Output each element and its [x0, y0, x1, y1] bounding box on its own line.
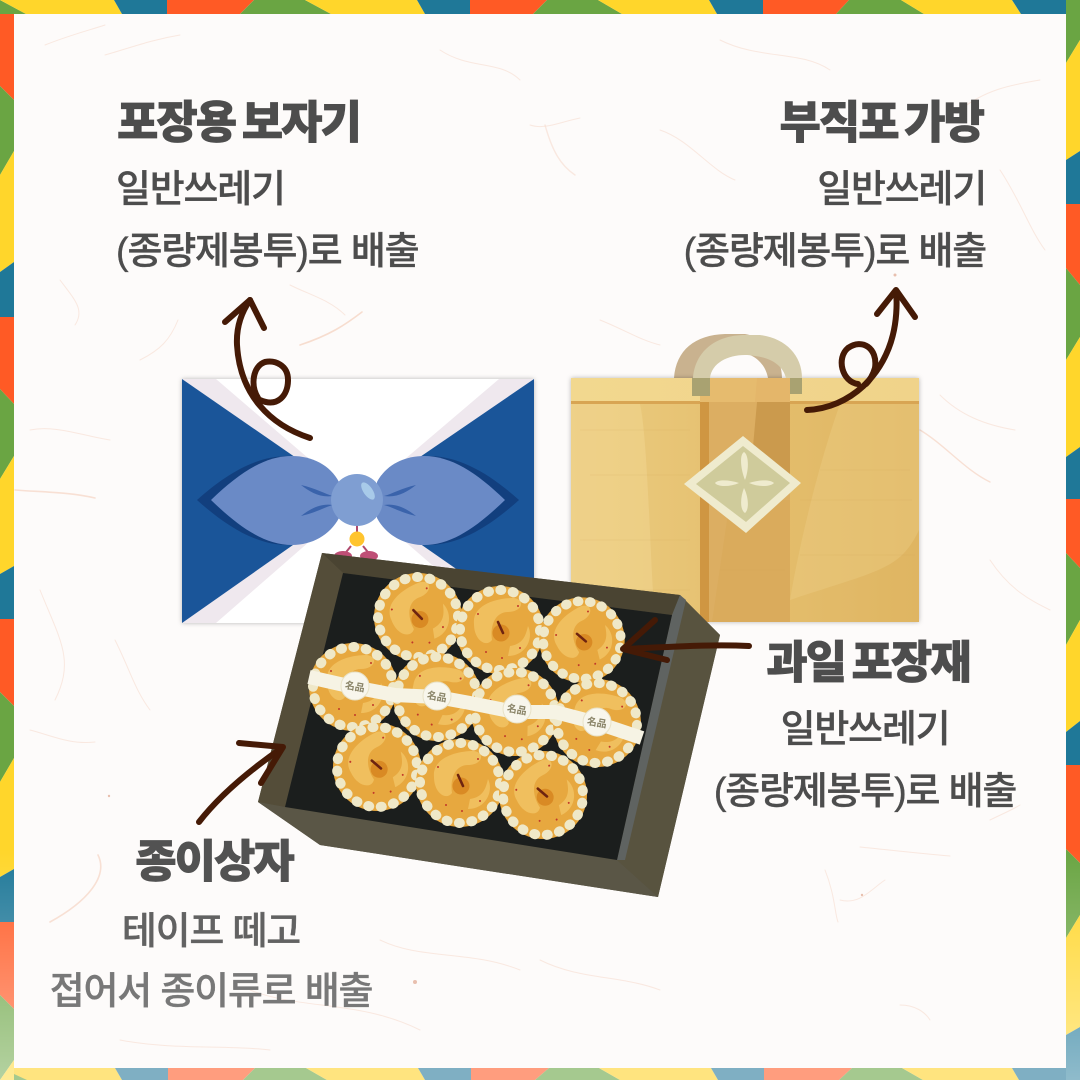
text block: non-woven bag: [684, 97, 986, 273]
bow dark edges: [197, 456, 519, 545]
heading: cloth: 포장용 보자기: [117, 97, 360, 148]
bow creases: [301, 485, 416, 516]
cloth disposal text: [116, 169, 419, 273]
arrow: bag to heading: [807, 290, 915, 410]
bow knot: [331, 474, 383, 526]
colored left border: [0, 14, 14, 1080]
text block: fruit wrap: [714, 637, 1016, 813]
fruits in foam nets: [309, 561, 653, 853]
bag diamond emblem: [684, 436, 801, 533]
paper box disposal text: 접어서 종이류로 배출: [50, 971, 373, 1013]
colored bottom border: [14, 1068, 1066, 1080]
heading: fruit wrap: 과일 포장재: [766, 637, 970, 688]
arrow: to fruit wrap: [623, 620, 749, 660]
box walls: [258, 553, 720, 897]
arrow: cloth to heading: [225, 300, 310, 438]
bag body: [571, 378, 919, 622]
fruit wrap disposal text: [714, 709, 1016, 813]
bow left leaf: [211, 456, 339, 545]
illustration: wrapping cloth: [182, 379, 534, 623]
handle clips: [692, 378, 802, 396]
bag disposal text: [684, 169, 986, 273]
illustration: non-woven bag: [571, 334, 919, 622]
bow right leaf: [377, 456, 505, 545]
heading: bag: 부직포 가방: [779, 97, 985, 148]
cloth base: [182, 379, 534, 623]
fruit wrap disposal text: 일반쓰레기: [781, 709, 949, 751]
illustration: fruit box: [258, 553, 720, 897]
heading: paper box: 종이상자: [135, 836, 294, 887]
colored right border: [1066, 0, 1080, 1080]
arrow: to paper box: [199, 743, 283, 822]
bag front handle: [693, 335, 802, 378]
paper box disposal text: [50, 911, 373, 1013]
cloth disposal text: (종량제봉투)로 배출: [116, 231, 419, 273]
white bands with labels: [309, 672, 642, 738]
bag wood-grain lines: [580, 430, 915, 590]
tassel: [334, 525, 378, 561]
bag disposal text: 일반쓰레기: [817, 169, 986, 211]
white bands with labels: 名品: [344, 678, 366, 695]
colored top border: [0, 0, 1066, 14]
bag back handle: [674, 334, 782, 378]
cloth blue panels: [182, 379, 357, 623]
white bands with labels: 名品: [586, 714, 608, 731]
paper box disposal text: 테이프 떼고: [122, 911, 300, 953]
white bands with labels: 名品: [426, 688, 448, 705]
cloth disposal text: 일반쓰레기: [116, 169, 285, 211]
white bands with labels: 名品: [506, 701, 528, 718]
text block: wrapping cloth: [116, 97, 419, 273]
fruit wrap disposal text: (종량제봉투)로 배출: [714, 771, 1016, 813]
text block: paper box: [50, 836, 373, 1013]
bag disposal text: (종량제봉투)로 배출: [684, 231, 986, 273]
